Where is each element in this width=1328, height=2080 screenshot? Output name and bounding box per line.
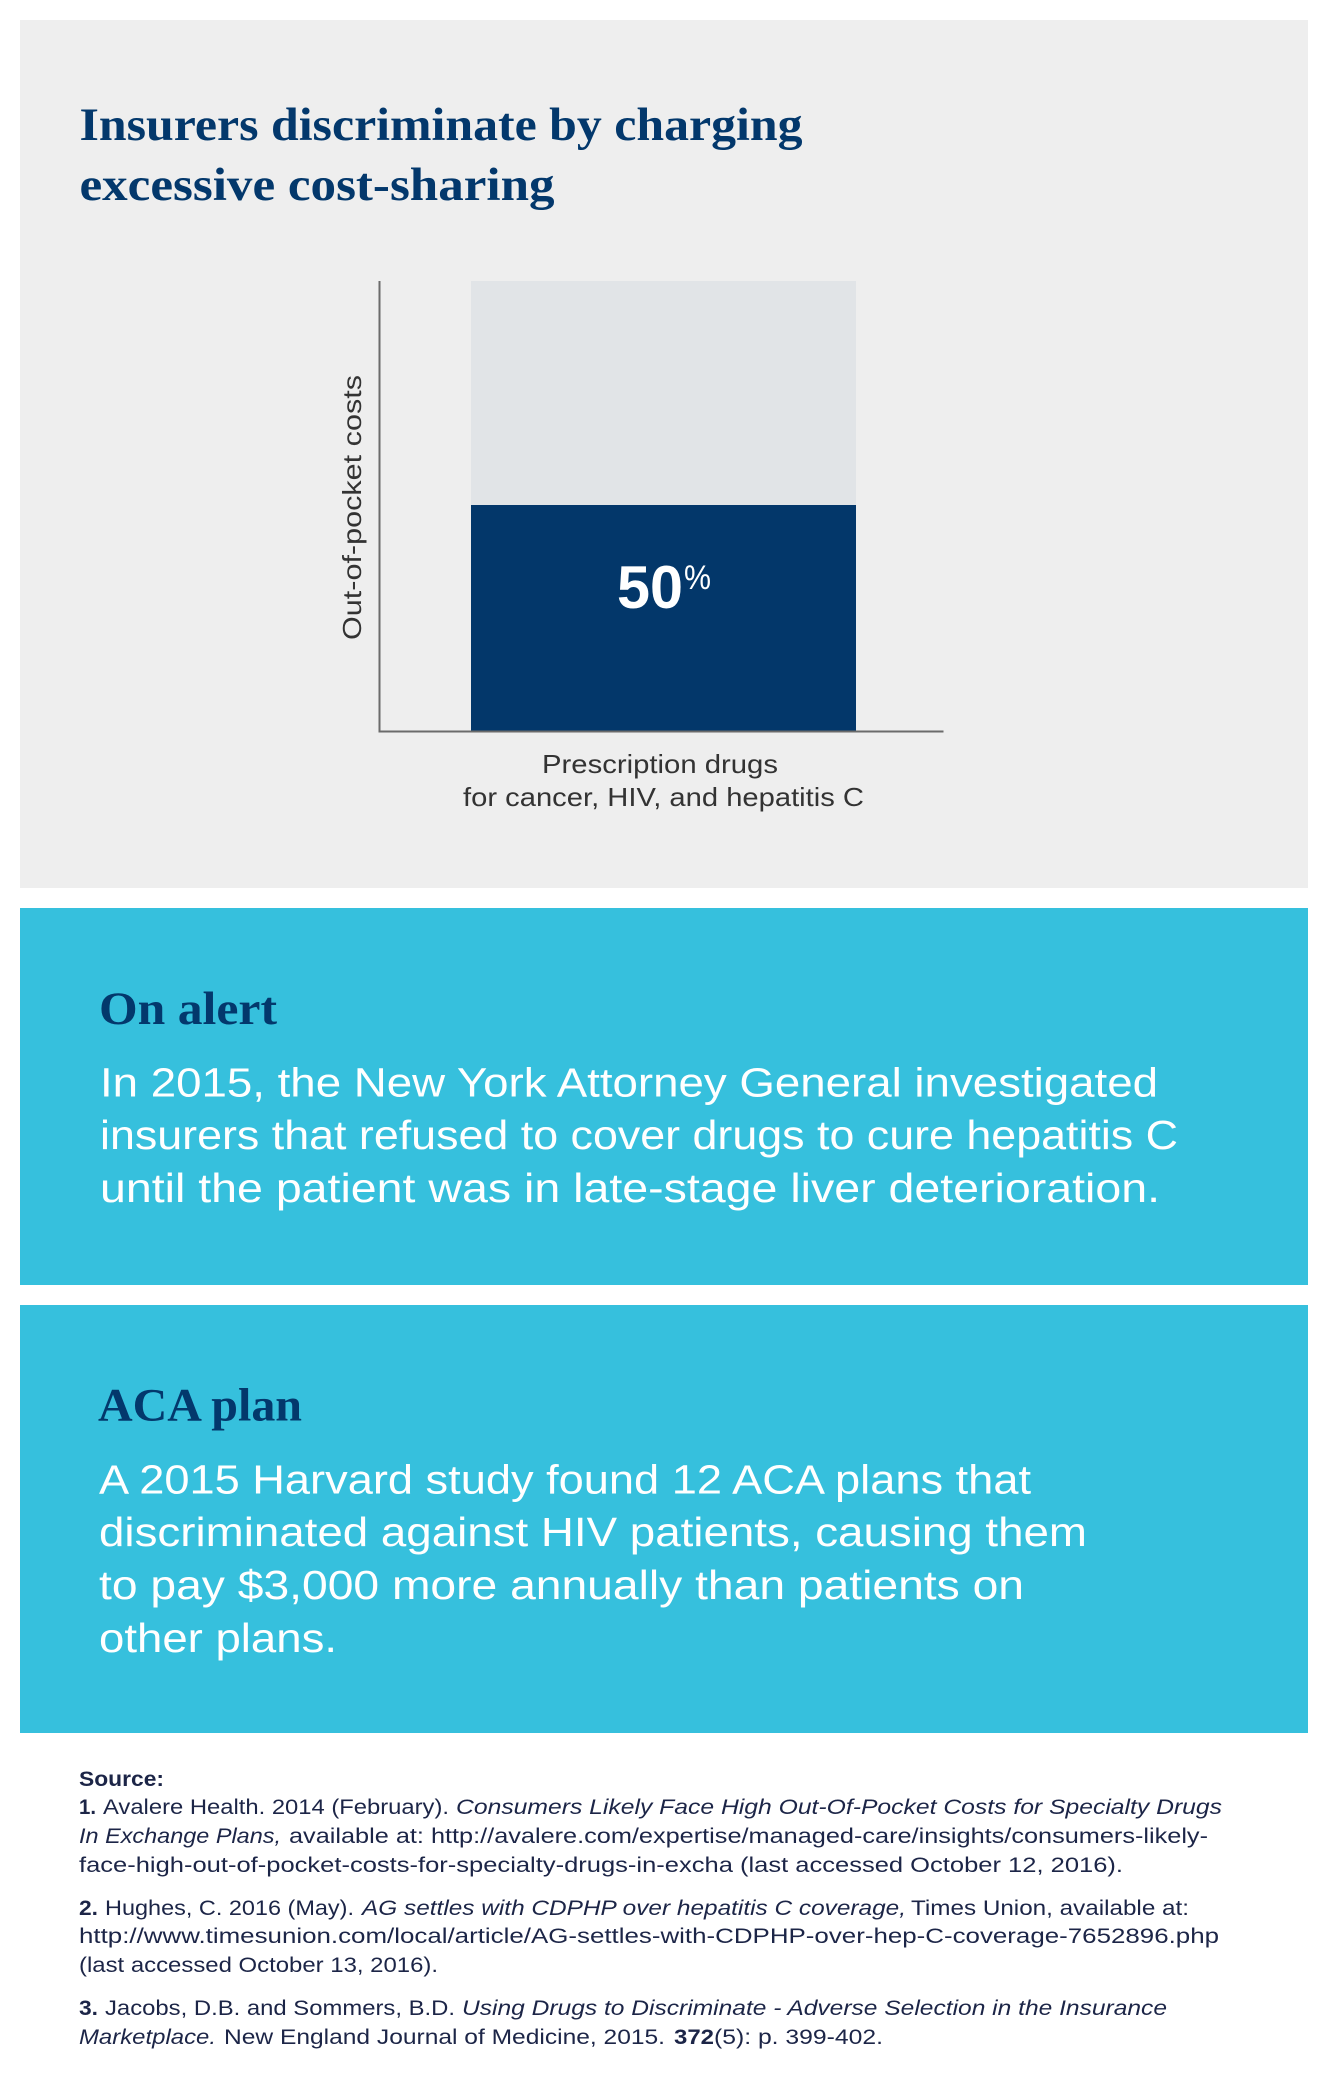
source 2: Hughes, C. 2016 (May). <box>105 1896 354 1920</box>
source 3: Marketplace. <box>79 2025 216 2049</box>
body text: on alert: In 2015, the New York Attorney General investigated <box>100 1060 1158 1106</box>
bar: full out-of-pocket cost <box>471 281 856 505</box>
value label: 50%: % <box>684 559 711 597</box>
x-axis label: for cancer, HIV, and hepatitis C <box>463 782 864 812</box>
source 3: Jacobs, D.B. and Sommers, B.D. <box>105 1996 455 2020</box>
source 1: 1. <box>79 1795 96 1819</box>
source 3: New England Journal of Medicine, 2015. <box>224 2025 665 2049</box>
bar chart <box>337 281 944 812</box>
x-axis label <box>463 749 864 812</box>
source 3: Using Drugs to Discriminate - Adverse Selection in the Insurance <box>462 1996 1167 2020</box>
source 1: available at: http://avalere.com/expertise/managed-care/insights/consumers-likely- <box>289 1824 1208 1848</box>
panel: cost-sharing chart <box>20 20 1308 888</box>
source 1: face-high-out-of-pocket-costs-for-specialty-drugs-in-excha (last accessed October 12, 2016). <box>79 1853 1123 1877</box>
source 3 <box>79 1996 1167 2049</box>
title: excessive cost-sharing <box>80 159 555 211</box>
source 2 <box>79 1896 1219 1977</box>
source 3: (5): p. 399-402. <box>714 2025 883 2049</box>
panel: ACA plan <box>20 1305 1308 1733</box>
x-axis label: Prescription drugs <box>542 749 778 779</box>
value label: 50%: 50 <box>617 554 683 621</box>
sources <box>79 1767 1222 2049</box>
source heading: Source: <box>79 1767 164 1791</box>
panel: on alert <box>20 908 1308 1285</box>
chart axes <box>380 281 944 732</box>
source 3: 372 <box>674 2025 714 2049</box>
body text: ACA plan: discriminated against HIV patients, causing them <box>99 1509 1087 1555</box>
body text: on alert: insurers that refused to cover drugs to cure hepatitis C <box>100 1112 1178 1158</box>
title: Insurers discriminate by charging <box>80 99 803 151</box>
source 2: 2. <box>79 1896 98 1920</box>
body text: on alert: until the patient was in late-stage liver deterioration. <box>100 1165 1160 1211</box>
source 2: (last accessed October 13, 2016). <box>79 1953 438 1977</box>
source 2: AG settles with CDPHP over hepatitis C coverage, <box>360 1896 906 1920</box>
body text: on alert <box>100 1060 1178 1211</box>
bar: 50 percent share <box>471 505 856 732</box>
source 3: 3. <box>79 1996 98 2020</box>
heading: on alert: On alert <box>99 983 277 1035</box>
source 1: Avalere Health. 2014 (February). <box>103 1795 449 1819</box>
source 1: In Exchange Plans, <box>79 1824 281 1848</box>
body text: ACA plan: other plans. <box>99 1615 337 1661</box>
source 2: http://www.timesunion.com/local/article/AG-settles-with-CDPHP-over-hep-C-coverage-7652896.php <box>79 1924 1219 1948</box>
source 1: Consumers Likely Face High Out-Of-Pocket Costs for Specialty Drugs <box>456 1795 1222 1819</box>
body text: ACA plan: A 2015 Harvard study found 12 ACA plans that <box>99 1456 1032 1502</box>
heading: ACA plan: ACA plan <box>98 1380 302 1432</box>
y-axis label: Out-of-pocket costs <box>337 375 367 640</box>
source 1 <box>79 1795 1222 1877</box>
body text: ACA plan: to pay $3,000 more annually than patients on <box>99 1562 1024 1608</box>
source 2: Times Union, available at: <box>911 1896 1189 1920</box>
title <box>80 99 803 211</box>
body text: ACA plan <box>99 1456 1087 1661</box>
